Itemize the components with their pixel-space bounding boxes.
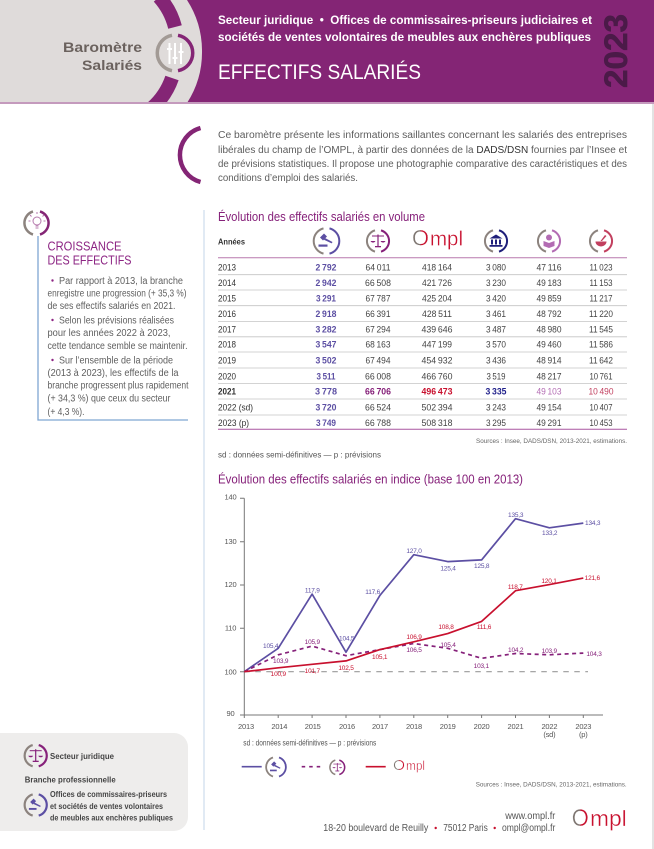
branch label: Branche professionnelle — [25, 775, 116, 785]
logo: Ompl legend — [393, 757, 425, 774]
year 2023: 2023 — [598, 14, 634, 88]
panel: sector legend — [0, 733, 188, 831]
row 2016: 66 391 — [366, 309, 390, 320]
logo: Ompl legend: O — [393, 757, 405, 774]
row 2015: 425 204 — [422, 293, 452, 304]
data labels: OMPL: 108,8 — [438, 624, 454, 631]
barometer label: Baromètre — [63, 39, 142, 55]
sidebar bullets: (+ 34,3 %) que ceux du secteur — [48, 394, 171, 404]
sidebar bullets: pour les années 2022 à 2023, — [48, 328, 170, 339]
data labels: commissaires-priseurs: 117,9 — [305, 588, 320, 594]
intro text — [218, 130, 627, 184]
row 2022: 10 407 — [590, 402, 612, 413]
icon: person with book — [538, 230, 560, 252]
row 2018 — [218, 340, 613, 351]
data labels: commissaires-priseurs: 104,5 — [339, 636, 355, 642]
row 2017: 2017 — [218, 325, 236, 336]
icon: bank — [485, 230, 507, 252]
row 2019: 2019 — [218, 355, 236, 366]
row 2019: 3 436 — [486, 355, 506, 366]
x axis labels: (sd) — [543, 730, 556, 739]
data labels: OMPL: 100,9 — [271, 671, 287, 678]
row 2022: 2022 (sd) — [218, 402, 253, 413]
sidebar heading: DES EFFECTIFS — [48, 252, 132, 268]
x axis labels: 2018 — [406, 722, 422, 731]
row 2023: 3 295 — [486, 418, 506, 429]
row 2013: 3 080 — [486, 262, 506, 273]
data labels: secteur juridique: 103,1 — [474, 663, 490, 670]
row 2020: 3 519 — [486, 371, 506, 382]
sidebar heading — [48, 238, 132, 268]
data labels: secteur juridique: 103,9 — [542, 648, 558, 655]
main title: EFFECTIFS SALARIÉS — [218, 59, 421, 84]
row 2013: 2 792 — [316, 262, 336, 273]
row 2023: 3 749 — [316, 418, 336, 429]
x axis labels: 2014 — [271, 722, 287, 731]
x axis labels: 2022 — [541, 722, 557, 731]
sidebar bullets: Selon les prévisions réalisées — [59, 316, 174, 326]
row 2021 highlighted: 10 490 — [588, 386, 614, 397]
sidebar bullets: (2013 à 2023), les effectifs de la — [48, 368, 179, 379]
row 2021 highlighted: 3 335 — [486, 386, 507, 397]
row 2018: 68 163 — [366, 340, 390, 351]
row 2021 highlighted: 496 473 — [422, 386, 452, 397]
row 2015: 2015 — [218, 293, 236, 304]
row 2022: 3 243 — [486, 402, 506, 413]
row 2020 — [218, 371, 612, 382]
sector label: Secteur juridique — [50, 751, 114, 761]
row 2015: 11 217 — [590, 293, 612, 304]
data labels: commissaires-priseurs: 134,3 — [585, 520, 601, 527]
icon: scales — [367, 230, 389, 252]
purple ring arcs — [152, 0, 175, 108]
row 2017: 3 282 — [316, 325, 336, 336]
header subtitle: sociétés de ventes volontaires de meubles aux enchères publiques — [218, 32, 591, 44]
data labels: secteur juridique: 105,9 — [305, 639, 321, 646]
footer contact: ompl@ompl.fr — [502, 823, 556, 834]
branch name: de meubles aux enchères publiques — [50, 813, 173, 823]
header subtitle — [218, 15, 592, 44]
row 2023: 66 788 — [365, 418, 391, 429]
row 2013: 11 023 — [590, 262, 612, 273]
data labels: OMPL: 102,5 — [338, 665, 354, 672]
row 2014 — [218, 278, 612, 289]
row 2014: 2 942 — [316, 278, 336, 289]
y axis labels: 90 — [227, 709, 234, 718]
data labels: secteur juridique: 103,9 — [273, 658, 289, 665]
logo: Ompl footer: O — [572, 805, 589, 832]
logo: Ompl: O — [412, 226, 429, 251]
sidebar bullets: cette tendance semble se maintenir. — [48, 341, 188, 352]
sidebar bullets: Sur l’ensemble de la période — [59, 356, 173, 366]
row 2021 highlighted: 49 103 — [536, 386, 562, 397]
data labels: secteur juridique: 104,2 — [508, 647, 524, 654]
x axis labels: (p) — [579, 730, 588, 739]
table source: Sources : Insee, DADS/DSN, 2013-2021, estimations. — [476, 438, 627, 445]
row 2022: 3 720 — [316, 402, 336, 413]
y axis labels: 110 — [225, 624, 236, 632]
sidebar bullets: de ses effectifs salariés en 2021. — [48, 301, 176, 312]
data labels: secteur juridique: 104,3 — [586, 651, 602, 658]
sidebar bullets: (+ 4,3 %). — [48, 407, 84, 418]
row 2017 — [218, 325, 613, 336]
axes — [240, 498, 603, 718]
row 2013: 2013 — [218, 262, 236, 273]
x axis labels: 2021 — [508, 722, 523, 731]
logo: Ompl footer — [572, 805, 627, 832]
row 2022 — [218, 402, 612, 413]
y axis labels: 100 — [225, 668, 236, 676]
x axis labels: 2016 — [339, 722, 355, 731]
y axis labels — [225, 492, 236, 718]
row 2023 — [218, 418, 612, 429]
row 2015: 49 859 — [536, 293, 562, 304]
data labels: OMPL: 120,1 — [541, 578, 557, 585]
data labels: commissaires-priseurs: 125,8 — [474, 563, 490, 570]
sidebar: croissance des effectifs — [24, 212, 189, 420]
row 2021 highlighted: 3 778 — [315, 386, 337, 397]
header subtitle: Secteur juridique • Offices de commissaires-priseurs judiciaires et — [218, 15, 592, 27]
row 2015: 3 420 — [486, 293, 506, 304]
chart source: Sources : Insee, DADS/DSN, 2013-2021, estimations. — [476, 782, 627, 788]
row 2018: 447 199 — [422, 340, 452, 351]
row 2017: 439 646 — [422, 325, 452, 336]
y axis labels: 130 — [225, 537, 236, 546]
row 2016: 428 511 — [422, 309, 452, 320]
sidebar bullets — [48, 276, 189, 418]
row 2013 — [218, 262, 612, 273]
row 2013: 47 116 — [536, 262, 562, 273]
sidebar bullets: branche progressent plus rapidement — [48, 380, 189, 392]
data labels: OMPL: 101,7 — [305, 668, 321, 675]
row 2020: 466 760 — [422, 371, 452, 382]
row 2020: 10 761 — [590, 371, 612, 382]
logo: Ompl footer: mpl — [590, 806, 627, 831]
data labels: commissaires-priseurs — [263, 512, 601, 650]
row 2018: 2018 — [218, 340, 236, 351]
chart note: sd : données semi-définitives — p : prévisions — [243, 738, 376, 748]
series: secteur juridique — [244, 644, 583, 672]
data labels: OMPL: 105,1 — [372, 654, 388, 661]
row 2023: 49 291 — [536, 418, 562, 429]
row 2017: 48 980 — [536, 325, 562, 336]
row 2023: 10 453 — [590, 418, 612, 429]
x axis labels — [238, 722, 591, 739]
icon: gavel branch — [25, 794, 47, 816]
row 2021 highlighted: 66 706 — [365, 386, 391, 397]
reference line 100 — [244, 671, 588, 673]
branch name: et sociétés de ventes volontaires — [50, 801, 163, 811]
header band — [0, 0, 654, 108]
x axis labels: 2023 — [575, 722, 591, 731]
row 2021 highlighted — [218, 386, 614, 397]
row 2022: 49 154 — [536, 402, 562, 413]
row 2020: 66 008 — [365, 371, 391, 382]
row 2017: 67 294 — [366, 325, 390, 336]
intro text: libérales du champ de l’OMPL, à partir des données de la DADS/DSN fournies par l’Insee et — [218, 145, 627, 156]
row 2019: 67 494 — [366, 355, 390, 366]
page edge — [652, 103, 654, 849]
x axis labels: 2017 — [372, 722, 388, 731]
row 2016: 11 220 — [589, 309, 613, 320]
data labels: OMPL: 121,6 — [585, 575, 601, 582]
icon: mortar — [590, 230, 612, 252]
row 2015 — [218, 293, 612, 304]
chart heading: Évolution des effectifs salariés en indice (base 100 en 2013) — [218, 472, 523, 486]
row 2013: 418 164 — [422, 262, 452, 273]
row 2014: 2014 — [218, 278, 236, 289]
logo: Ompl: mpl — [430, 229, 463, 251]
row 2022: 502 394 — [422, 402, 452, 413]
data labels: commissaires-priseurs: 105,4 — [263, 643, 279, 650]
row 2023: 2023 (p) — [218, 418, 249, 429]
x axis labels: 2013 — [238, 722, 254, 731]
barometer label — [63, 39, 142, 73]
data labels: OMPL: 118,7 — [508, 584, 523, 591]
branch name — [50, 789, 173, 823]
row 2019: 3 502 — [316, 355, 336, 366]
row 2016: 3 461 — [486, 309, 506, 320]
line chart — [225, 492, 603, 739]
barometre icon — [157, 35, 193, 71]
row 2017: 11 545 — [589, 325, 613, 336]
row 2019 — [218, 355, 613, 366]
icon: scales sector — [25, 745, 47, 766]
row 2020: 2020 — [218, 371, 236, 382]
branch name: Offices de commissaires-priseurs — [50, 789, 167, 799]
footer contact — [323, 811, 556, 834]
icon: gavel legend — [266, 758, 286, 776]
row 2018: 11 586 — [589, 340, 613, 351]
series: OMPL — [244, 578, 583, 672]
icon: light bulb — [24, 212, 49, 234]
logo: Ompl — [412, 226, 463, 251]
row 2018: 3 570 — [486, 340, 506, 351]
row 2016: 48 792 — [536, 309, 562, 320]
data labels: OMPL: 111,6 — [477, 624, 492, 631]
data labels: secteur juridique: 106,5 — [406, 647, 422, 654]
data labels: commissaires-priseurs: 135,3 — [508, 512, 524, 519]
row 2019: 454 932 — [422, 355, 452, 366]
y axis labels: 120 — [225, 580, 236, 589]
row 2013: 64 011 — [366, 262, 390, 273]
table header: années: Années — [218, 238, 246, 246]
row 2021 highlighted: 2021 — [218, 386, 237, 397]
row 2020: 48 217 — [536, 371, 562, 382]
data labels: commissaires-priseurs: 127,0 — [406, 548, 422, 555]
column divider — [203, 210, 205, 830]
row 2014: 66 508 — [365, 278, 391, 289]
footer contact: 18-20 boulevard de Reuilly — [323, 823, 428, 834]
row 2019: 11 642 — [589, 355, 613, 366]
intro bracket — [180, 128, 200, 182]
logo: Ompl legend: mpl — [406, 758, 425, 773]
row 2017: 3 487 — [486, 325, 506, 336]
table heading: Évolution des effectifs salariés en volume — [218, 209, 425, 224]
row 2018: 3 547 — [316, 340, 336, 351]
data labels: OMPL: 106,9 — [406, 634, 422, 641]
footer contact: www.ompl.fr — [504, 811, 556, 822]
row 2016: 2016 — [218, 309, 236, 320]
icon: gavel — [314, 228, 339, 254]
row 2023: 508 318 — [422, 418, 452, 429]
row 2015: 3 291 — [316, 293, 337, 304]
x axis labels: 2015 — [305, 722, 321, 731]
data labels: secteur juridique: 105,4 — [440, 642, 456, 649]
chart legend — [242, 757, 425, 776]
row 2014: 11 153 — [590, 278, 612, 289]
x axis labels: 2020 — [474, 722, 490, 731]
data labels: commissaires-priseurs: 133,2 — [542, 530, 558, 537]
icon: scales legend — [330, 760, 345, 774]
row 2014: 421 726 — [422, 278, 452, 289]
intro text: conditions d’emploi des salariés. — [218, 173, 358, 184]
row 2022: 66 524 — [365, 402, 391, 413]
footer contact: 75012 Paris — [443, 823, 488, 834]
row 2014: 49 183 — [536, 278, 562, 289]
row 2015: 67 787 — [366, 293, 390, 304]
data labels: commissaires-priseurs: 125,4 — [440, 566, 456, 572]
intro text: de prévisions statistiques. Il propose une photographie comparative des caractéristiques et des — [218, 159, 627, 170]
row 2018: 49 460 — [536, 340, 562, 351]
intro text: Ce baromètre présente les informations saillantes concernant les salariés des entreprises — [218, 130, 627, 141]
row 2016: 2 918 — [316, 309, 336, 320]
data labels: secteur juridique — [273, 639, 602, 670]
sidebar bullets: Par rapport à 2013, la branche — [59, 276, 183, 287]
series: commissaires-priseurs — [244, 519, 583, 672]
table note: sd : données semi-définitives — p : prévisions — [218, 450, 381, 460]
row 2019: 48 914 — [536, 355, 562, 366]
row 2016 — [218, 309, 613, 320]
row 2014: 3 230 — [486, 278, 506, 289]
sidebar bullets: enregistre une progression (+ 35,3 %) — [48, 288, 186, 300]
table: effectifs en volume — [218, 226, 627, 429]
sidebar heading: CROISSANCE — [48, 238, 122, 254]
y axis labels: 140 — [225, 492, 236, 502]
x axis labels: 2019 — [440, 722, 456, 731]
row 2020: 3 511 — [316, 371, 336, 382]
data labels: OMPL — [271, 575, 601, 678]
barometer label: Salariés — [82, 57, 142, 73]
data labels: commissaires-priseurs: 117,6 — [365, 589, 381, 596]
